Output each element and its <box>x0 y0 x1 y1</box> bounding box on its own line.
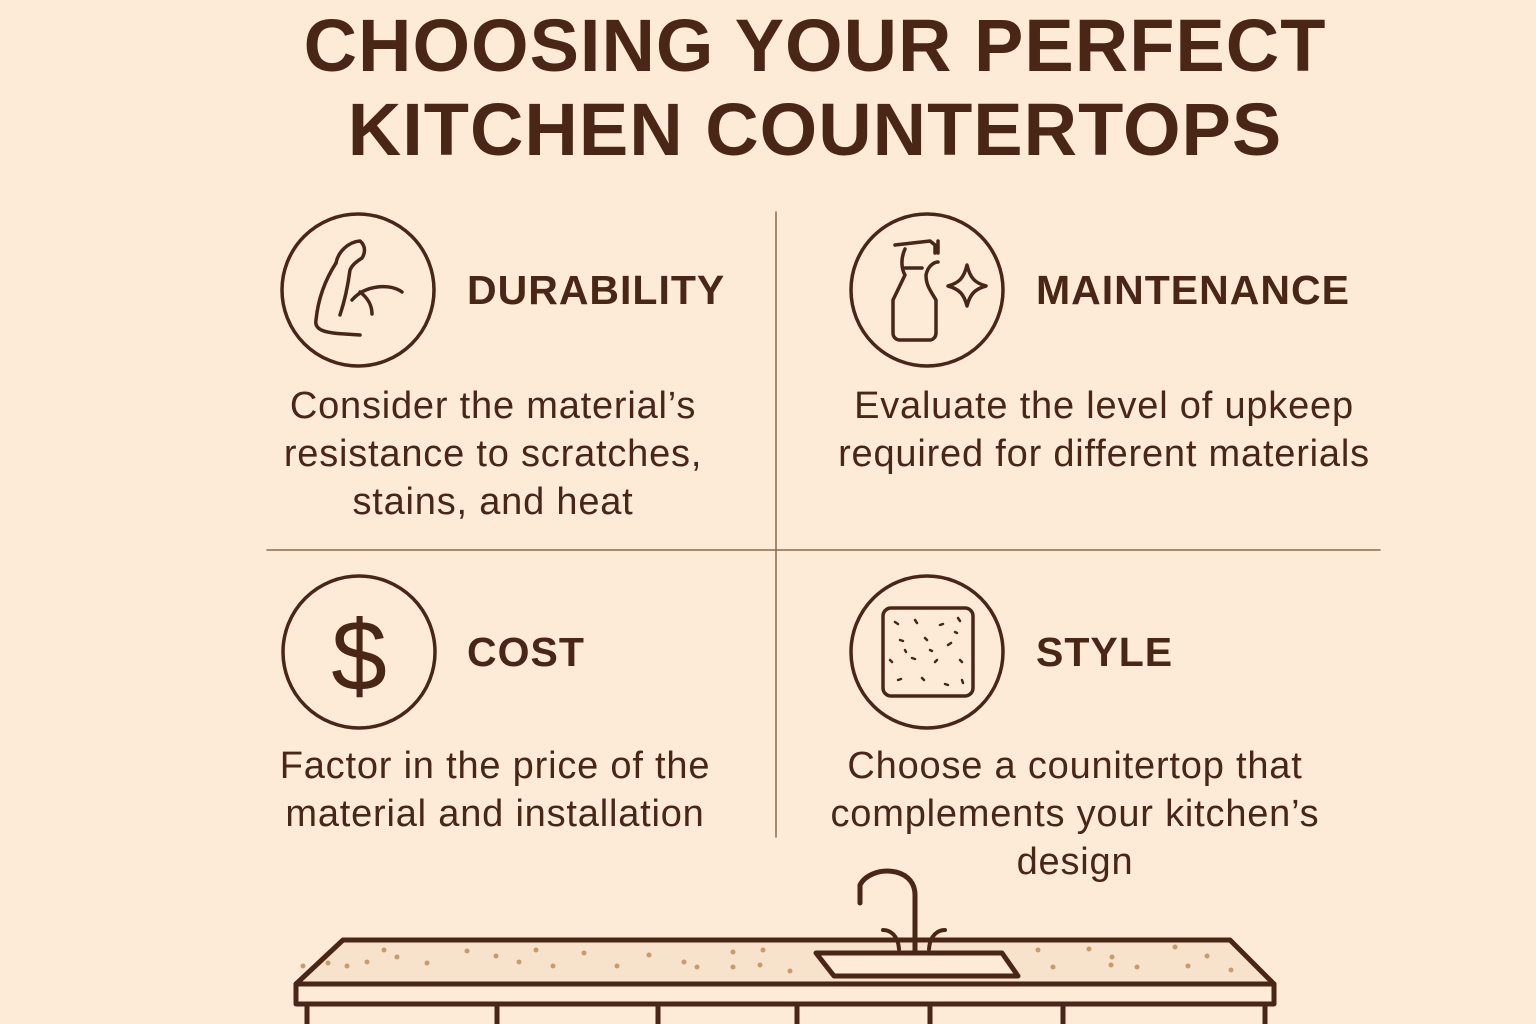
heading: maintenance: MAINTENANCE <box>1036 267 1350 313</box>
icon: dollar <box>283 576 435 728</box>
heading: style: STYLE <box>1036 629 1173 675</box>
text: style: Choose a counitertop that complements your kitchen’s design <box>830 745 1319 883</box>
heading: durability: DURABILITY <box>467 267 725 313</box>
icon: stone sample <box>851 576 1003 728</box>
illustration: countertop with sink <box>296 871 1274 1024</box>
text: maintenance: Evaluate the level of upkeep required for different materials <box>838 385 1370 475</box>
title: KITCHEN COUNTERTOPS <box>348 88 1282 171</box>
icon: spray bottle <box>851 214 1003 366</box>
text: cost: Factor in the price of the material and installation <box>280 745 710 835</box>
heading: cost: COST <box>467 629 585 675</box>
icon: dollar: $ <box>331 600 387 712</box>
icon: flexed arm <box>282 214 434 366</box>
title <box>304 4 1326 171</box>
title: CHOOSING YOUR PERFECT <box>304 4 1326 87</box>
text: durability: Consider the material’s resistance to scratches, stains, and heat <box>284 385 702 523</box>
